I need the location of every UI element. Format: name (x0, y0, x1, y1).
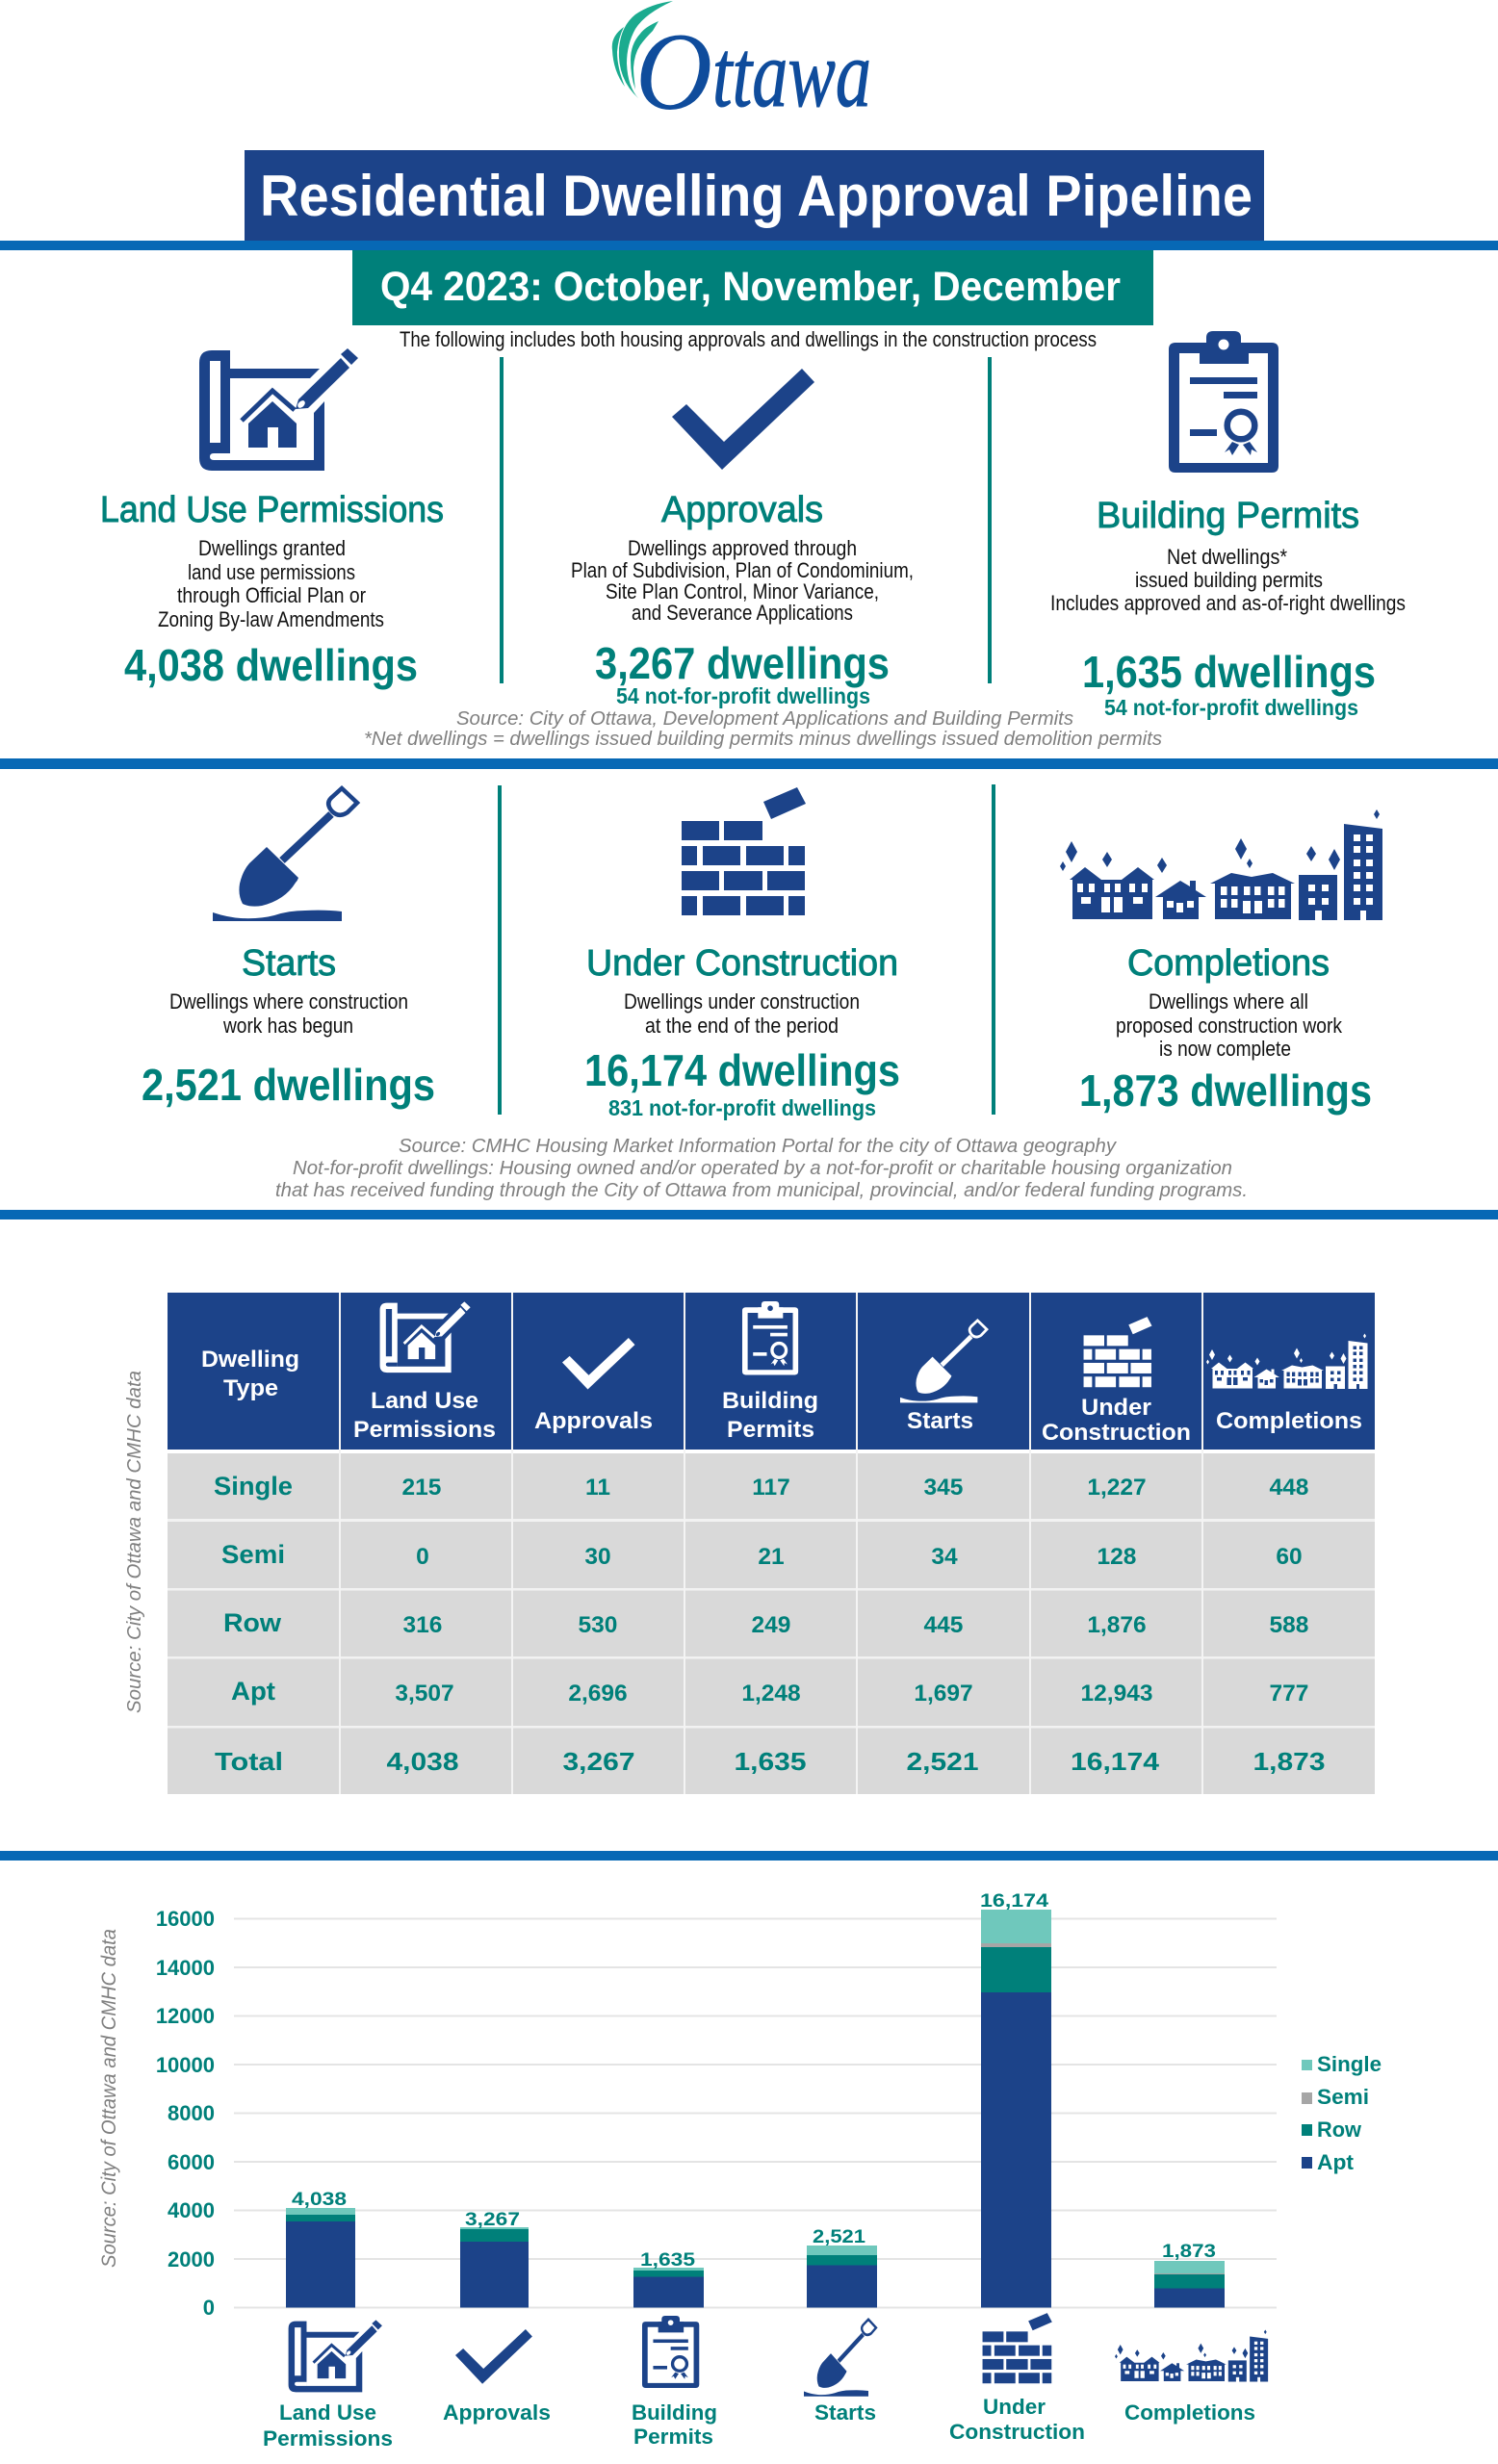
source note: approvals (364, 708, 1162, 750)
source note: CMHC: Not-for-profit dwellings: Housing owned and/or operated by a not-for-profit or charitable housing organization (293, 1158, 1232, 1179)
row: semi (221, 1540, 1303, 1570)
description: Dwellings where construction (169, 989, 408, 1014)
x axis: completions: Completions (1124, 2400, 1255, 2425)
value: 1,873 dwellings (1079, 1065, 1372, 1116)
row: apt: 2,696 (568, 1681, 628, 1707)
heading: Land Use Permissions (100, 490, 444, 530)
description: issued building permits (1135, 568, 1323, 592)
row: single: 11 (585, 1475, 610, 1501)
x axis: land use permissions (263, 2320, 393, 2451)
value: 16,174 dwellings (584, 1045, 900, 1095)
row: single (214, 1472, 1308, 1501)
icon: bricks (682, 787, 806, 915)
description: is now complete (1159, 1037, 1291, 1061)
x axis: building permits: Building (632, 2400, 717, 2425)
table: dwelling type by stage (124, 1293, 1375, 1794)
description (624, 989, 860, 1038)
description (571, 536, 914, 625)
heading: Completions (1127, 943, 1330, 984)
not-for-profit note: 831 not-for-profit dwellings (608, 1095, 876, 1120)
legend: Apt (1317, 2150, 1355, 2174)
bar: completions (1154, 2242, 1225, 2308)
row: single: Single (214, 1472, 293, 1501)
row: total: 4,038 (387, 1747, 458, 1776)
description (158, 536, 384, 631)
panel: under construction (584, 787, 900, 1120)
chart source note: Source: City of Ottawa and CMHC data (98, 1929, 120, 2268)
description: Plan of Subdivision, Plan of Condominium, (571, 558, 914, 582)
y axis labels: 6000 (168, 2150, 215, 2174)
y axis labels: 4000 (168, 2198, 215, 2222)
intro text: The following includes both housing approvals and dwellings in the construction process (400, 327, 1097, 351)
bar: starts: 2,521 (813, 2227, 866, 2247)
row: total: Total (215, 1747, 283, 1776)
source note: approvals: *Net dwellings = dwellings issued building permits minus dwellings issued demolition permits (364, 729, 1162, 750)
x axis: under construction: Construction (949, 2420, 1085, 2444)
legend: Semi (1317, 2085, 1369, 2109)
panel: completions (1060, 809, 1382, 1116)
table header: Permits (727, 1417, 814, 1443)
heading: Under Construction (586, 943, 898, 984)
table header: Approvals (534, 1408, 653, 1434)
period band: Q4 2023: October, November, December (380, 264, 1121, 310)
description: at the end of the period (645, 1014, 839, 1038)
row: apt: 12,943 (1081, 1681, 1152, 1707)
chart: stacked bars by dwelling type (98, 1891, 1382, 2451)
y axis labels: 16000 (156, 1907, 215, 1931)
description: Dwellings granted (198, 536, 346, 560)
x axis: land use permissions: Permissions (263, 2426, 393, 2451)
x axis: starts (804, 2320, 876, 2425)
table header: Building (722, 1388, 818, 1414)
row: total: 2,521 (907, 1747, 978, 1776)
bar: land use permissions: 4,038 (292, 2190, 347, 2210)
x axis: starts: Starts (814, 2400, 876, 2425)
row: apt: 3,507 (395, 1681, 454, 1707)
table header: Construction (1042, 1420, 1191, 1446)
heading: Approvals (661, 490, 823, 530)
y axis labels: 14000 (156, 1956, 215, 1980)
description: Dwellings under construction (624, 989, 860, 1014)
description (1116, 989, 1343, 1061)
row: semi: 128 (1098, 1544, 1136, 1570)
row: semi: 30 (584, 1544, 611, 1570)
title band: Residential Dwelling Approval Pipeline (260, 164, 1253, 228)
row: total: 1,873 (1253, 1747, 1325, 1776)
bar: building permits: 1,635 (640, 2250, 696, 2271)
bar: approvals (460, 2210, 529, 2308)
description: proposed construction work (1116, 1014, 1343, 1038)
y axis labels: 0 (203, 2296, 215, 2320)
legend: Single (1317, 2052, 1382, 2076)
icon: check mark (672, 369, 814, 470)
row: row: 316 (403, 1612, 442, 1638)
y axis labels: 12000 (156, 2004, 215, 2028)
table header: Land Use (371, 1388, 478, 1414)
panel: starts (142, 788, 435, 1110)
panel: building permits (1050, 331, 1406, 720)
x axis: completions (1115, 2329, 1268, 2425)
description (1050, 545, 1406, 615)
row: semi: 60 (1276, 1544, 1303, 1570)
table rows (168, 1293, 1375, 1794)
title band (245, 150, 1264, 241)
row: total: 16,174 (1071, 1747, 1160, 1776)
bar: land use permissions (286, 2190, 355, 2308)
period band (352, 250, 1153, 325)
row: single: 1,227 (1087, 1475, 1147, 1501)
x axis: approvals: Approvals (443, 2400, 551, 2425)
panel: approvals (571, 369, 914, 708)
x axis: under construction (949, 2313, 1085, 2444)
bar: under construction (980, 1891, 1051, 2308)
x axis: under construction: Under (983, 2395, 1046, 2419)
heading: Building Permits (1097, 496, 1359, 536)
row: row: 530 (579, 1612, 617, 1638)
y axis labels: 8000 (168, 2101, 215, 2125)
description: through Official Plan or (177, 583, 366, 607)
description: Zoning By-law Amendments (158, 607, 384, 631)
description: Includes approved and as-of-right dwellings (1050, 591, 1406, 615)
row: apt: 777 (1270, 1681, 1308, 1707)
source note: CMHC (275, 1136, 1248, 1201)
bar: approvals: 3,267 (465, 2210, 520, 2230)
value: 3,267 dwellings (595, 638, 890, 688)
x axis: approvals (443, 2329, 551, 2425)
row: apt (231, 1677, 1308, 1707)
description: Dwellings where all (1149, 989, 1308, 1014)
x axis: building permits: Permits (633, 2425, 713, 2449)
legend (1302, 2052, 1382, 2174)
row: row: Row (223, 1608, 282, 1637)
x axis: building permits (632, 2316, 717, 2449)
row: semi: Semi (221, 1540, 285, 1569)
description: work has begun (222, 1014, 353, 1038)
row: single: 215 (402, 1475, 441, 1501)
row: row: 1,876 (1087, 1612, 1147, 1638)
x axis: land use permissions: Land Use (279, 2400, 376, 2425)
row: apt: 1,697 (914, 1681, 973, 1707)
row: semi: 0 (416, 1544, 429, 1570)
logo: City of Ottawa (612, 1, 871, 134)
description: Dwellings approved through (628, 536, 857, 560)
row: single: 345 (924, 1475, 963, 1501)
not-for-profit note: 54 not-for-profit dwellings (616, 683, 870, 708)
legend: Row (1317, 2118, 1362, 2142)
bar: building permits (633, 2250, 704, 2308)
y axis labels (156, 1907, 215, 2320)
row: row: 588 (1270, 1612, 1308, 1638)
y axis labels: 2000 (168, 2247, 215, 2272)
icon: clipboard (1169, 331, 1278, 473)
bar: completions: 1,873 (1162, 2242, 1216, 2262)
value: 2,521 dwellings (142, 1060, 435, 1110)
bar: starts (807, 2227, 877, 2308)
description (169, 989, 408, 1038)
y axis labels: 10000 (156, 2053, 215, 2077)
row: apt: Apt (231, 1677, 275, 1706)
table header: Permissions (353, 1417, 496, 1443)
description: Site Plan Control, Minor Variance, (606, 579, 879, 603)
row: semi: 21 (758, 1544, 785, 1570)
table header: Type (223, 1375, 278, 1401)
source note: CMHC: Source: CMHC Housing Market Information Portal for the city of Ottawa geography (399, 1136, 1117, 1157)
row: total: 1,635 (734, 1747, 807, 1776)
table header: Under (1081, 1395, 1151, 1421)
table header (168, 1293, 1375, 1450)
table header: Starts (907, 1408, 973, 1434)
not-for-profit note: 54 not-for-profit dwellings (1104, 695, 1358, 720)
bar: under construction: 16,174 (980, 1891, 1049, 1912)
row: row: 249 (752, 1612, 790, 1638)
panel: land use permissions (100, 348, 444, 690)
row: semi: 34 (931, 1544, 958, 1570)
table header: Dwelling (201, 1347, 299, 1373)
row: total (215, 1747, 1325, 1776)
row: apt: 1,248 (741, 1681, 801, 1707)
description: and Severance Applications (632, 601, 853, 625)
source note: approvals: Source: City of Ottawa, Development Applications and Building Permits (456, 708, 1073, 730)
table header: Completions (1216, 1408, 1362, 1434)
row: row (223, 1608, 1308, 1638)
row: row: 445 (924, 1612, 963, 1638)
source note: CMHC: that has received funding through the City of Ottawa from municipal, provincial, and/or federal funding programs. (275, 1180, 1248, 1201)
heading: Starts (242, 943, 336, 984)
logo: City of Ottawa: ttawa (712, 20, 871, 127)
description: Net dwellings* (1167, 545, 1287, 569)
table source note: Source: City of Ottawa and CMHC data (124, 1371, 145, 1713)
row: single: 117 (752, 1475, 790, 1501)
description: land use permissions (188, 560, 355, 584)
row: single: 448 (1270, 1475, 1308, 1501)
logo: City of Ottawa: O (635, 11, 712, 134)
icon: skyline (1060, 809, 1382, 920)
icon: plan and pencil (199, 348, 358, 471)
value: 4,038 dwellings (124, 640, 418, 690)
icon: shovel (213, 788, 357, 921)
row: total: 3,267 (562, 1747, 635, 1776)
value: 1,635 dwellings (1082, 647, 1376, 697)
